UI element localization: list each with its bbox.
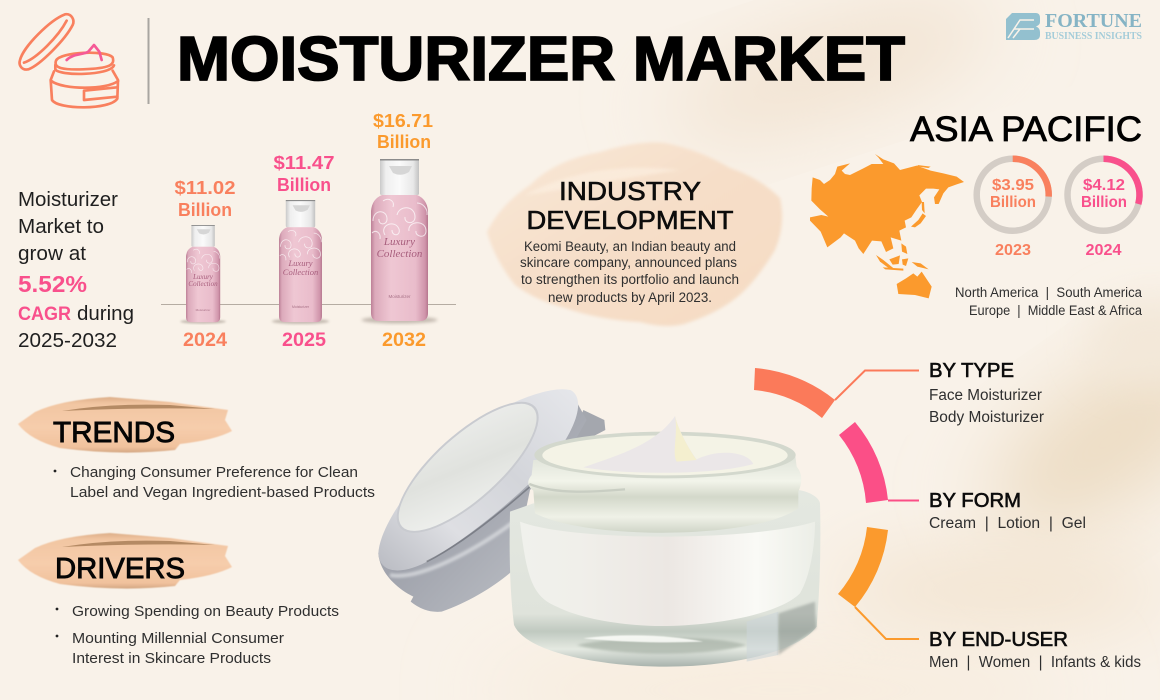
panel: trends: Changing Consumer Preference for Clean — [70, 464, 358, 481]
panel: trends: Label and Vegan Ingredient-based Products — [70, 484, 375, 501]
donut chart: 2023: Billion — [990, 194, 1036, 211]
logo: Fortune Business Insights — [1006, 10, 1142, 42]
other regions — [955, 285, 1142, 318]
panel: drivers: Mounting Millennial Consumer — [72, 630, 284, 647]
panel: industry development: skincare company, announced plans — [520, 255, 737, 270]
panel: industry development: DEVELOPMENT — [526, 205, 734, 235]
growth statement: during — [77, 303, 134, 325]
growth statement: 5.52% — [18, 271, 87, 297]
arc: by type — [754, 368, 919, 418]
jar neck — [528, 453, 801, 533]
donut chart: 2023: 2023 — [995, 242, 1031, 259]
panel: drivers: Growing Spending on Beauty Products — [72, 603, 339, 620]
bottle 2032: Collection — [377, 248, 423, 260]
bottle 2024: 2024 — [183, 330, 227, 351]
donut chart: 2023: $3.95 — [992, 177, 1034, 194]
bottle 2024: Collection — [188, 280, 218, 288]
bottle 2025: Moisturizer — [292, 305, 310, 309]
panel: drivers: DRIVERS — [55, 553, 185, 585]
jar base — [510, 490, 820, 667]
panel: industry development: INDUSTRY — [559, 176, 701, 206]
segment: by form: BY FORM — [929, 490, 1021, 512]
segment: by end-user: BY END-USER — [929, 629, 1068, 651]
cream surface — [542, 416, 788, 475]
segment: by form: Cream | Lotion | Gel — [929, 515, 1086, 532]
bottle 2032: Luxury — [383, 236, 415, 248]
panel: industry development: new products by April 2023. — [548, 290, 712, 305]
jar thread ring — [529, 484, 625, 492]
bottle 2032: $16.71 — [373, 110, 433, 131]
logo: Fortune Business Insights: FORTUNE — [1045, 10, 1142, 32]
donut chart: 2024: 2024 — [1086, 242, 1122, 259]
heading: Asia Pacific: ASIA PACIFIC — [910, 110, 1142, 149]
growth statement: CAGR — [18, 304, 71, 325]
segment: by type: Body Moisturizer — [929, 409, 1044, 426]
bottle 2032: 2032 — [382, 330, 426, 351]
arc: by form — [839, 422, 919, 503]
bottle 2025: Luxury — [287, 258, 313, 268]
growth statement: grow at — [18, 243, 86, 265]
icon: cream jar outline — [20, 14, 118, 107]
jar lid — [378, 382, 605, 612]
panel: industry development: to strengthen its portfolio and launch — [521, 272, 739, 287]
growth statement: Moisturizer — [18, 189, 118, 211]
bottle 2025 — [272, 152, 334, 351]
segment: by end-user — [929, 629, 1141, 671]
map: Asia Pacific — [810, 154, 964, 298]
donut chart: 2024 — [1068, 159, 1140, 259]
bottle 2024: Moisturizer — [196, 308, 210, 312]
bottle 2024: Luxury — [192, 273, 214, 281]
panel: industry development: Keomi Beauty, an Indian beauty and — [524, 239, 736, 254]
other regions: North America | South America — [955, 285, 1142, 300]
swatch: drivers — [18, 533, 232, 589]
bottle 2024: Billion — [178, 199, 232, 220]
segment: by form — [929, 490, 1086, 532]
segment: by type: BY TYPE — [929, 360, 1014, 382]
other regions: Europe | Middle East & Africa — [969, 303, 1142, 318]
bottle 2032: Billion — [377, 131, 431, 152]
logo: Fortune Business Insights: BUSINESS INSIGHTS — [1045, 31, 1142, 42]
growth statement: Market to — [18, 216, 104, 238]
growth statement: 2025-2032 — [18, 330, 117, 352]
panel: industry development — [487, 142, 782, 326]
bottle 2024 — [174, 177, 236, 351]
donut chart: 2024: Billion — [1081, 194, 1127, 211]
segment: by end-user: Men | Women | Infants & kids — [929, 654, 1141, 671]
segment: by type: Face Moisturizer — [929, 387, 1042, 404]
segment: by type — [929, 360, 1044, 426]
title: MOISTURIZER MARKET — [177, 25, 905, 94]
bar chart: bottle sizes by year — [161, 110, 456, 351]
illustration: open cream jar — [378, 382, 820, 667]
bottle 2025: 2025 — [282, 330, 326, 351]
bottle 2032 — [362, 110, 438, 351]
panel: drivers — [18, 533, 339, 667]
swatch: trends — [18, 397, 232, 453]
bottle 2024: $11.02 — [174, 177, 236, 198]
panel: trends: TRENDS — [53, 417, 175, 449]
bottle 2025: Billion — [277, 174, 331, 195]
bottle 2032: Moisturizer — [388, 294, 411, 299]
donut chart: 2024: $4.12 — [1083, 177, 1125, 194]
panel: drivers: Interest in Skincare Products — [72, 650, 271, 667]
growth statement — [18, 189, 134, 352]
jar rim — [534, 432, 796, 478]
arc: by end-user — [838, 527, 919, 639]
donut chart: 2023 — [977, 159, 1049, 259]
bottle 2025: Collection — [283, 267, 318, 277]
panel: trends — [18, 397, 375, 501]
bottle 2025: $11.47 — [274, 152, 334, 173]
